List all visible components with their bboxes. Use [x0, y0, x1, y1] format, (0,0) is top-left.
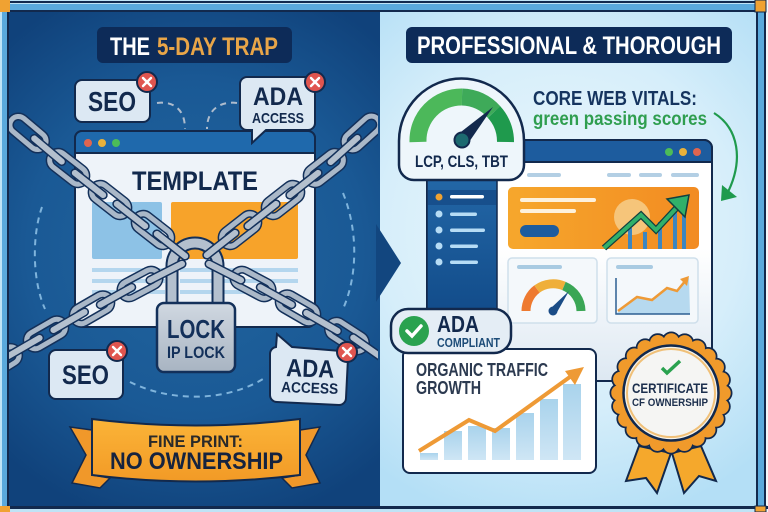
badge: certificate of ownership: CERTIFICATE: [632, 380, 708, 396]
bubble: SEO bottom: SEO: [62, 360, 109, 390]
professional browser window: [427, 140, 712, 381]
bubble: SEO top: [75, 72, 157, 122]
heading: professional and thorough: [406, 27, 732, 63]
text: core web vitals: CORE WEB VITALS:: [533, 88, 697, 110]
chain: upper right: [207, 113, 383, 255]
chain: lower left: [0, 264, 182, 380]
chain: lower right: [209, 264, 383, 358]
text: core web vitals: [533, 88, 707, 130]
banner: fine print no ownership: NO OWNERSHIP: [110, 448, 283, 475]
badge: ADA compliant: ADA: [437, 311, 479, 337]
panel: organic traffic growth: [403, 349, 596, 473]
dashed connector lines: [35, 103, 354, 397]
badge: ADA compliant: COMPLIANT: [437, 335, 500, 350]
bubble: ADA access top: ACCESS: [252, 110, 304, 127]
bubble: ADA access bottom: ACCESS: [281, 379, 338, 398]
template browser window: [75, 131, 315, 327]
padlock: lock, IP lock: [157, 303, 235, 372]
gauge dome: [399, 78, 524, 180]
bubble: SEO bottom: [49, 341, 127, 399]
padlock: lock, IP lock: LOCK: [167, 314, 225, 344]
arrow: divider chevron: [376, 224, 401, 302]
card: small gauge: [508, 258, 597, 323]
badge: certificate of ownership: [619, 341, 723, 493]
badge: ADA compliant: [391, 309, 511, 353]
connector line: [596, 380, 616, 382]
template browser window: TEMPLATE: [132, 166, 258, 196]
bubble: ADA access top: [240, 72, 325, 143]
lock shackle: [172, 243, 218, 305]
banner: fine print no ownership: [70, 419, 320, 488]
bubble: ADA access bottom: ADA: [286, 354, 335, 384]
card: small line chart: [607, 258, 698, 323]
gauge dome: LCP, CLS, TBT: [415, 152, 508, 171]
bubble: SEO top: SEO: [88, 86, 136, 117]
banner: fine print no ownership: FINE PRINT:: [148, 432, 243, 451]
panel: organic traffic growth: ORGANIC TRAFFIC: [416, 360, 548, 380]
bubble: ADA access bottom: [270, 334, 357, 405]
badge: certificate of ownership: CF OWNERSHIP: [632, 397, 708, 409]
heading: the 5-day trap: [97, 27, 292, 63]
chain: upper left: [6, 113, 185, 256]
bubble: ADA access top: ADA: [253, 83, 303, 111]
sidebar: [427, 162, 497, 312]
panel: professional and thorough background: [380, 12, 756, 506]
padlock: lock, IP lock: IP LOCK: [167, 343, 226, 362]
heading: the 5-day trap: 5-DAY TRAP: [157, 33, 278, 61]
panel: organic traffic growth: GROWTH: [416, 378, 481, 398]
panel: the 5-day trap background: [8, 12, 380, 506]
hero banner with growth arrow: [508, 187, 699, 249]
heading: the 5-day trap: THE: [110, 33, 150, 61]
text: core web vitals: green passing scores: [533, 109, 707, 130]
arrow: green curve to window: [714, 113, 737, 201]
